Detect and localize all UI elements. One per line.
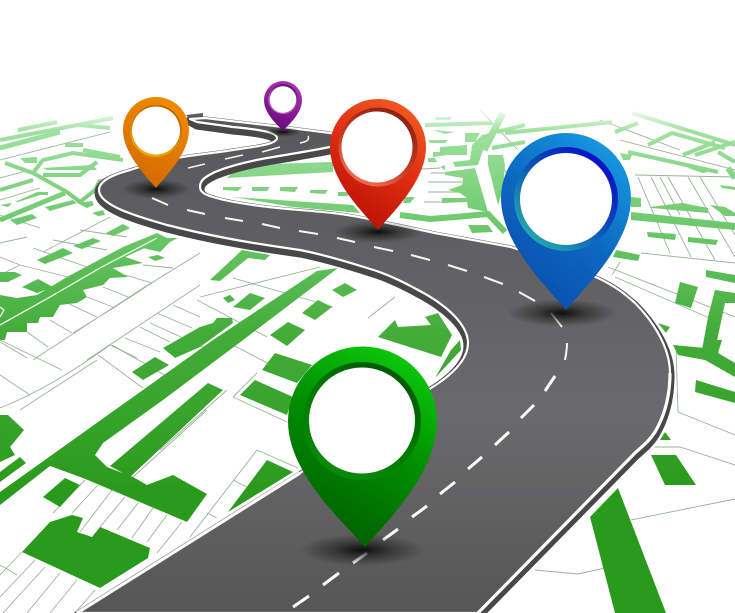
green blocks behind the far road <box>0 157 360 213</box>
pin: green <box>288 346 437 547</box>
far right green blocks <box>403 117 735 261</box>
near edge lines <box>77 373 670 613</box>
pin shadows <box>122 127 617 566</box>
asphalt surface <box>77 118 670 613</box>
road <box>77 113 670 613</box>
white centre line in green road <box>0 238 157 325</box>
centre dashes near section <box>293 376 555 607</box>
road end cap <box>186 113 203 122</box>
centre dashes far section <box>188 136 309 168</box>
centre dashes middle section <box>152 198 567 360</box>
far green roads <box>0 113 735 232</box>
near green blocks <box>0 268 735 613</box>
road shoulder <box>77 121 670 613</box>
middle green blocks <box>0 200 735 350</box>
pin: orange <box>123 97 189 188</box>
pin: blue <box>501 133 631 310</box>
pin: purple <box>264 81 302 131</box>
map horizon fade <box>0 0 735 106</box>
pin: red <box>330 99 426 230</box>
